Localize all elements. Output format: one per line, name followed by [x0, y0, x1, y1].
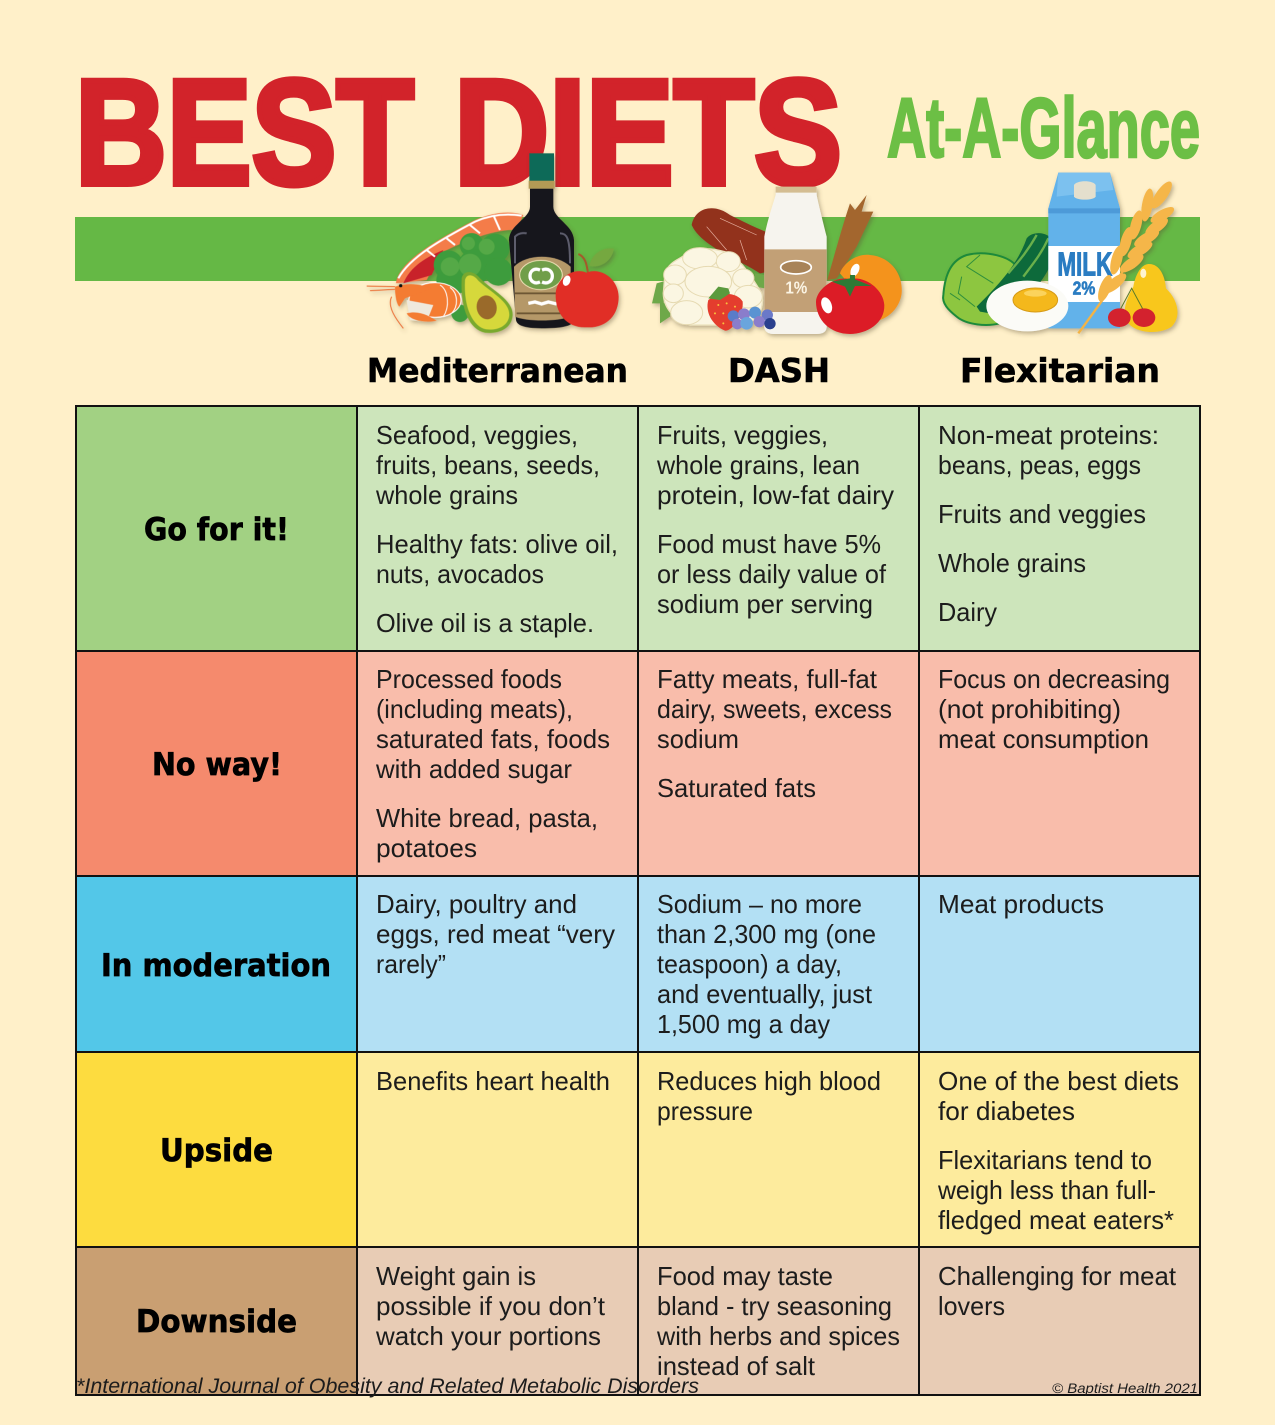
cell: Mediterranean downside	[375, 1261, 606, 1351]
cell: Flexitarian no way: (not prohibiting)	[938, 694, 1121, 724]
cell: Flexitarian upside: weigh less than full-	[937, 1175, 1156, 1205]
cell: DASH go for it: sodium per serving	[657, 589, 873, 619]
cell: DASH no way: sodium	[657, 724, 739, 754]
cell: DASH in moderation	[657, 889, 876, 1039]
cell: Mediterranean no way	[375, 664, 610, 863]
cell: DASH in moderation: and eventually, just	[657, 979, 873, 1009]
cell: Mediterranean no way: (including meats),	[376, 694, 573, 724]
cell: DASH downside: with herbs and spices	[656, 1321, 900, 1351]
cell: DASH in moderation: teaspoon) a day,	[657, 949, 842, 979]
cell: Flexitarian in moderation: Meat products	[938, 889, 1104, 919]
label: Downside: Downside	[136, 1304, 297, 1340]
green banner	[75, 217, 1200, 281]
cell: DASH go for it	[656, 420, 894, 619]
cell: DASH go for it: Food must have 5%	[657, 529, 881, 559]
cell: Flexitarian upside: fledged meat eaters*	[938, 1205, 1174, 1235]
cell: Mediterranean no way: White bread, pasta,	[376, 803, 598, 833]
cell: Flexitarian no way: Focus on decreasing	[938, 664, 1170, 694]
cell: DASH upside	[657, 1066, 881, 1126]
cell: Flexitarian go for it: Fruits and veggies	[938, 499, 1146, 529]
cell: Flexitarian no way	[938, 664, 1170, 754]
cell: DASH go for it: protein, low-fat dairy	[657, 480, 894, 510]
cell: DASH no way	[657, 664, 892, 803]
cell: Mediterranean downside: watch your portions	[375, 1321, 601, 1351]
label: Go for it!: Go for it!	[144, 512, 289, 548]
row: Go for it!	[76, 406, 1200, 651]
cell: DASH in moderation: Sodium – no more	[657, 889, 862, 919]
cell: Mediterranean upside: Benefits heart health	[376, 1066, 610, 1096]
cell: DASH no way: Saturated fats	[657, 773, 816, 803]
illustration: Flexitarian foods: MILK	[1057, 247, 1112, 284]
title: Best Diets	[75, 48, 842, 216]
cell: Flexitarian go for it: Whole grains	[938, 548, 1086, 578]
title: Best Diets: BEST	[75, 48, 414, 216]
cell: DASH go for it: whole grains, lean	[656, 450, 860, 480]
cell: Mediterranean downside: Weight gain is	[376, 1261, 536, 1291]
illustration: Mediterranean foods	[367, 153, 619, 333]
cell: DASH no way: Fatty meats, full-fat	[657, 664, 878, 694]
row: Upside	[76, 1052, 1200, 1247]
label: Upside: Upside	[160, 1133, 273, 1169]
cell: Flexitarian downside: Challenging for meat	[938, 1261, 1177, 1291]
cell: Mediterranean no way: potatoes	[376, 833, 477, 863]
cell: DASH no way: dairy, sweets, excess	[657, 694, 892, 724]
column heading: DASH: DASH	[728, 351, 830, 390]
cell: Flexitarian upside	[937, 1066, 1179, 1235]
copyright: © Baptist Health 2021	[1052, 1380, 1198, 1396]
cell: DASH go for it: Fruits, veggies,	[657, 420, 828, 450]
cell: Mediterranean go for it	[375, 420, 618, 638]
illustration: DASH foods	[652, 187, 902, 334]
cell: Flexitarian go for it	[938, 420, 1159, 627]
cell: Mediterranean go for it: Healthy fats: olive oil,	[376, 529, 618, 559]
row: In moderation	[76, 876, 1200, 1052]
cell: Flexitarian go for it: Non-meat proteins:	[938, 420, 1159, 450]
cell: Mediterranean go for it: whole grains	[375, 480, 518, 510]
illustration: DASH foods: 1%	[785, 277, 807, 297]
cell: DASH upside: Reduces high blood	[657, 1066, 881, 1096]
cell: Flexitarian no way: meat consumption	[938, 724, 1149, 754]
row: No way!	[76, 651, 1200, 876]
title: Best Diets: DIETS	[454, 48, 842, 216]
cell: DASH go for it: or less daily value of	[657, 559, 887, 589]
cell: DASH downside: instead of salt	[657, 1351, 816, 1381]
cell: DASH downside	[656, 1261, 900, 1381]
column heading: Mediterranean: Mediterranean	[367, 351, 628, 390]
cell: DASH in moderation: than 2,300 mg (one	[657, 919, 876, 949]
cell: DASH downside: bland - try seasoning	[657, 1291, 892, 1321]
cell: Flexitarian upside: Flexitarians tend to	[938, 1145, 1152, 1175]
cell: DASH downside: Food may taste	[657, 1261, 833, 1291]
cell: DASH in moderation: 1,500 mg a day	[657, 1009, 830, 1039]
column heading: Flexitarian: Flexitarian	[960, 351, 1160, 390]
cell: DASH upside: pressure	[657, 1096, 753, 1126]
illustration: Flexitarian foods: 2%	[1073, 278, 1096, 299]
cell: Mediterranean no way: with added sugar	[375, 754, 572, 784]
cell: Mediterranean go for it: fruits, beans, seeds,	[376, 450, 600, 480]
cell: Mediterranean go for it: Seafood, veggies,	[376, 420, 578, 450]
label: No way!: No way!	[152, 747, 282, 783]
cell: Flexitarian upside: One of the best diets	[938, 1066, 1179, 1096]
cell: Mediterranean go for it: nuts, avocados	[376, 559, 544, 589]
illustration: Flexitarian foods	[943, 173, 1178, 333]
cell: Mediterranean go for it: Olive oil is a staple.	[376, 608, 594, 638]
cell: Flexitarian upside: for diabetes	[938, 1096, 1075, 1126]
cell: Mediterranean in moderation: eggs, red meat “very	[376, 919, 615, 949]
label: In moderation: In moderation	[101, 948, 331, 984]
cell: Flexitarian go for it: beans, peas, eggs	[938, 450, 1141, 480]
cell: Mediterranean in moderation	[376, 889, 615, 979]
footnote: *International Journal of Obesity and Related Metabolic Disorders	[76, 1375, 700, 1398]
cell: Mediterranean downside: possible if you don’t	[376, 1291, 606, 1321]
cell: Mediterranean no way: Processed foods	[376, 664, 562, 694]
cell: Flexitarian downside	[938, 1261, 1177, 1321]
row: Downside	[76, 1247, 1200, 1395]
cell: Mediterranean in moderation: rarely”	[376, 949, 446, 979]
cell: Mediterranean in moderation: Dairy, poultry and	[376, 889, 577, 919]
cell: Flexitarian go for it: Dairy	[938, 597, 997, 627]
cell: Flexitarian downside: lovers	[938, 1291, 1005, 1321]
cell: Mediterranean no way: saturated fats, foods	[376, 724, 610, 754]
